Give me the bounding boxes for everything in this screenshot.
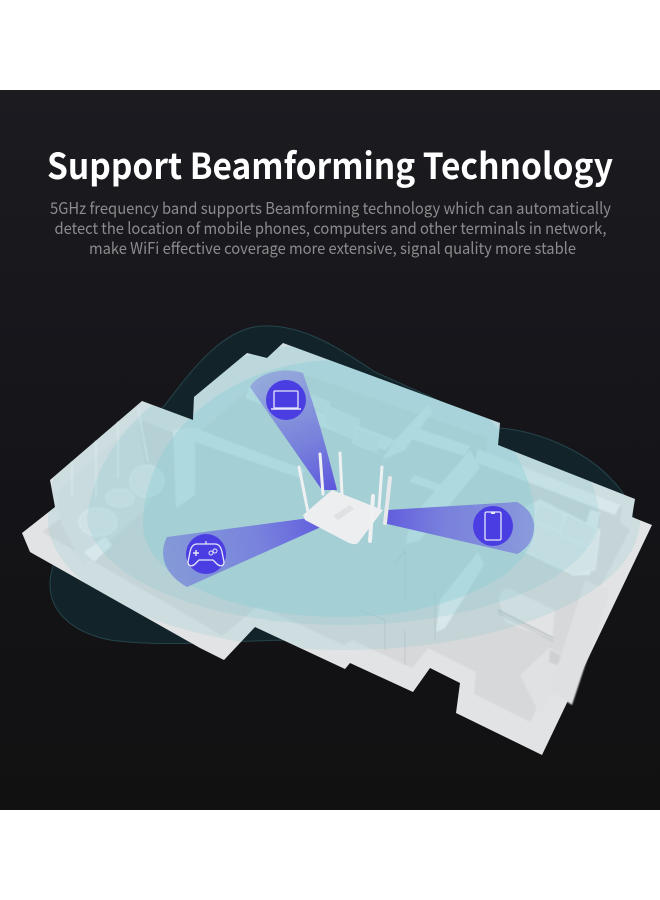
description text: make WiFi effective coverage more extensive, signal quality more stable	[89, 235, 576, 259]
rear antennas	[299, 453, 382, 512]
router label	[333, 505, 354, 520]
icon: game controller	[186, 534, 226, 574]
plan floor shade	[42, 368, 630, 722]
floor plan	[22, 300, 652, 755]
closet details	[360, 550, 435, 665]
title: Support Beamforming Technology	[47, 138, 613, 190]
description text	[50, 195, 612, 259]
bed	[510, 500, 600, 575]
infographic canvas	[0, 90, 660, 810]
front antennas	[370, 478, 390, 541]
air conditioner and bathroom	[498, 580, 610, 715]
beam to game controller	[163, 517, 321, 587]
plan base	[22, 343, 652, 755]
dark background panel	[0, 90, 660, 810]
sofas and round tables	[79, 388, 382, 536]
icon: mobile phone	[473, 506, 513, 546]
description text: 5GHz frequency band supports Beamforming technology which can automatically	[50, 195, 612, 219]
interior walls	[84, 385, 620, 632]
coverage rings	[48, 343, 640, 650]
left wall and curtains	[56, 408, 150, 565]
beam to phone	[383, 502, 534, 554]
description text: detect the location of mobile phones, computers and other terminals in network,	[54, 215, 606, 239]
router	[299, 453, 390, 544]
outer wifi coverage halo	[50, 326, 634, 644]
router body	[303, 490, 383, 544]
beam to laptop	[250, 371, 337, 490]
icon: laptop	[266, 380, 306, 420]
